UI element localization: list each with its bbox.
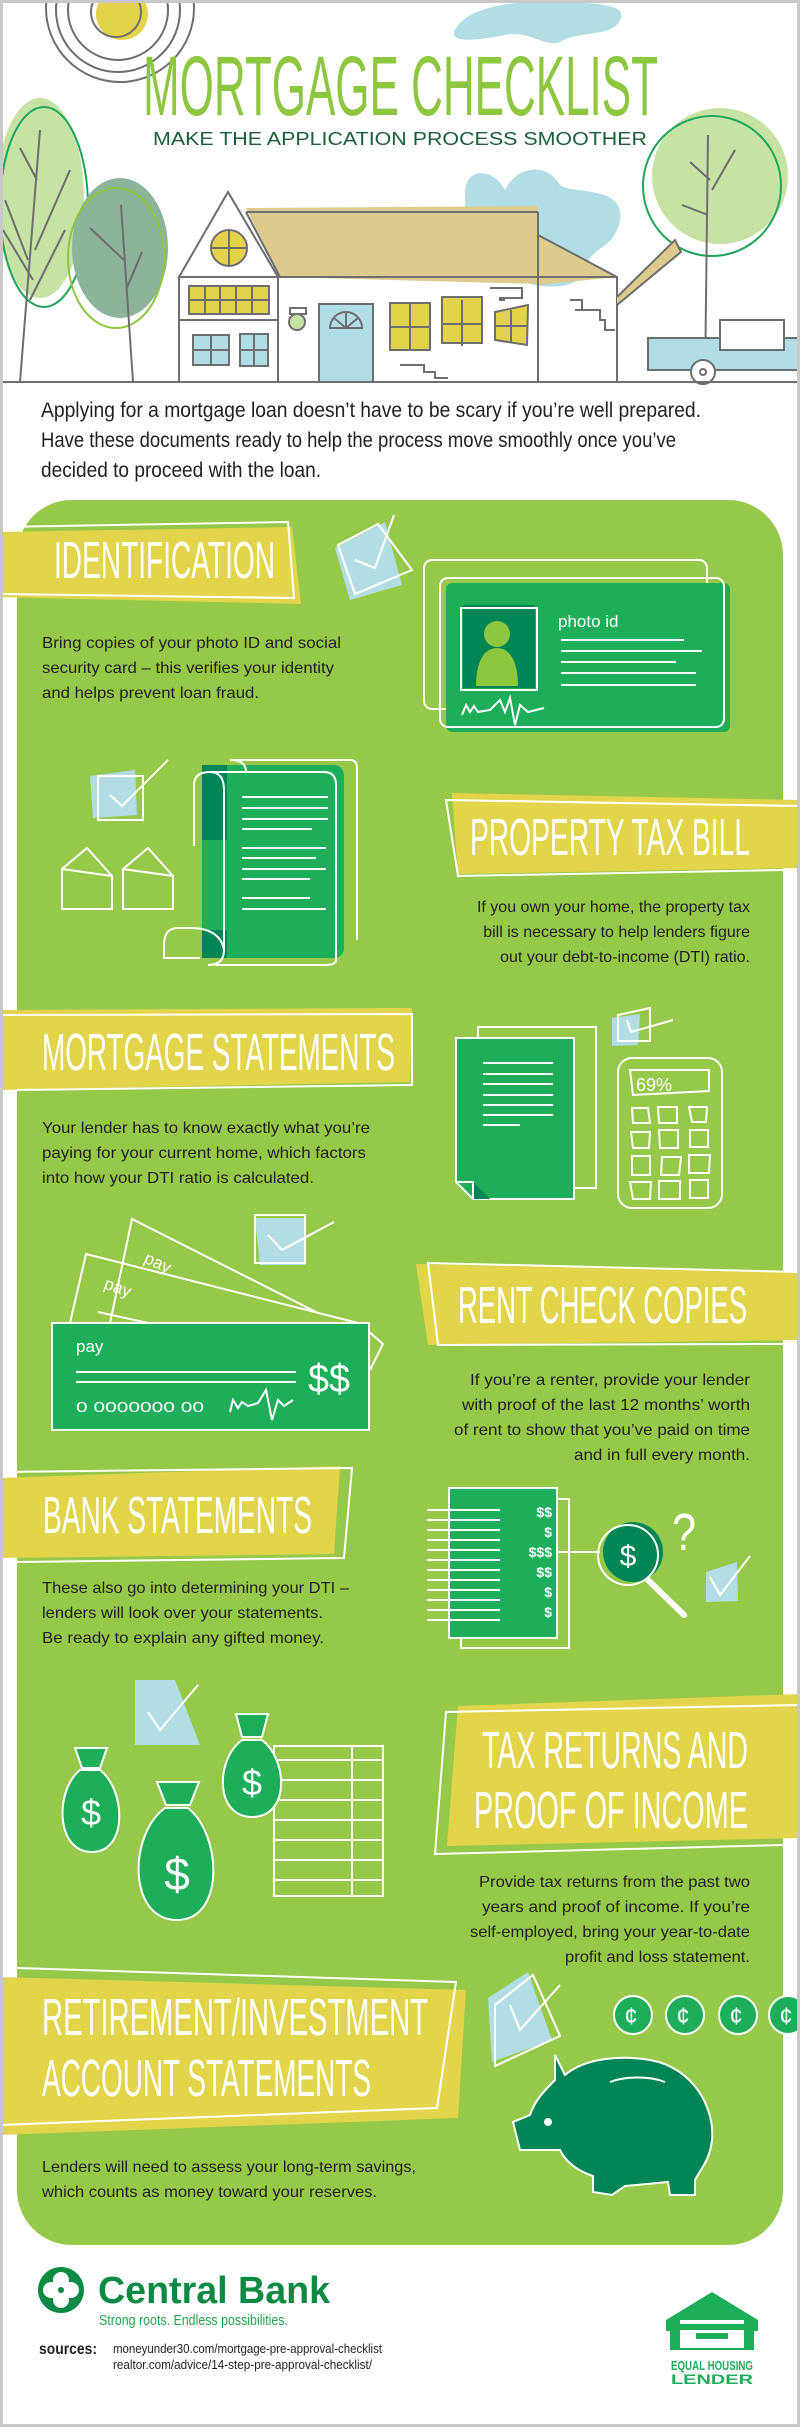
footer: sources: moneyunder30.com/mortgage-pre-approval-checklist xyxy=(113,2341,382,2356)
text: mortgage statements: Your lender has to know exactly what you’re xyxy=(42,1120,370,1137)
intro text: decided to proceed with the loan. xyxy=(41,459,321,482)
text: mortgage statements xyxy=(42,1120,370,1187)
icon: checkbox and houses xyxy=(62,760,173,909)
text: tax returns: profit and loss statement. xyxy=(565,1949,750,1966)
header illustration: sun xyxy=(46,0,194,82)
text: mortgage statements: paying for your current home, which factors xyxy=(42,1145,366,1162)
icon: piggy bank with coins: ¢ xyxy=(729,2003,743,2030)
icon: money bags and ledger xyxy=(63,1680,383,1920)
text: retirement: which counts as money toward your reserves. xyxy=(41,2184,377,2201)
text: rent check copies: and in full every month. xyxy=(574,1447,750,1464)
banner: bank statements xyxy=(0,1466,352,1562)
intro text: Have these documents ready to help the process move smoothly once you’ve xyxy=(41,429,676,452)
text: tax returns: Provide tax returns from the past two xyxy=(479,1874,750,1891)
header illustration: trees xyxy=(0,98,788,382)
text: rent check copies xyxy=(454,1372,751,1464)
icon: piggy bank with coins: ¢ xyxy=(676,2003,690,2030)
footer: equal housing lender logo: EQUAL HOUSING xyxy=(671,2358,753,2373)
icon: checks: 0 0000000 00 xyxy=(76,1399,204,1416)
header illustration: clouds xyxy=(454,2,621,287)
icon: money bags and ledger: $ xyxy=(81,1792,101,1833)
icon: documents xyxy=(456,1027,596,1199)
banner: identification xyxy=(0,522,301,604)
icon: scroll document xyxy=(164,760,357,965)
text: identification: security card – this verifies your identity xyxy=(42,660,334,677)
footer: central bank logo: Strong roots. Endless possibilities. xyxy=(99,2312,288,2329)
icon: bank statement with magnifier: $$$ xyxy=(529,1544,552,1560)
text: property tax: out your debt-to-income (DTI) ratio. xyxy=(500,949,750,966)
text: identification: and helps prevent loan fraud. xyxy=(42,685,259,702)
banner: tax returns and proof of income xyxy=(435,1694,800,1854)
icon: checks xyxy=(52,1215,383,1430)
banner: identification: IDENTIFICATION xyxy=(54,532,275,590)
icon: bank statement with magnifier: $ xyxy=(620,1540,637,1573)
text: tax returns xyxy=(470,1874,750,1966)
icon: checks: pay xyxy=(102,1274,134,1301)
footer: sources xyxy=(39,2341,382,2372)
text: bank statements: Be ready to explain any gifted money. xyxy=(42,1630,324,1647)
icon: bank statement with magnifier: $ xyxy=(544,1604,552,1620)
text: bank statements: lenders will look over your statements. xyxy=(42,1605,323,1622)
text: mortgage statements: into how your DTI ratio is calculated. xyxy=(42,1170,314,1187)
banner: mortgage statements xyxy=(0,1008,412,1090)
icon: piggy bank with coins: ¢ xyxy=(779,2003,793,2030)
text: retirement: Lenders will need to assess your long-term savings, xyxy=(42,2159,416,2176)
text: property tax: If you own your home, the property tax xyxy=(477,899,750,916)
footer: equal housing lender logo xyxy=(666,2292,758,2387)
icon: money bags and ledger: $ xyxy=(242,1762,262,1803)
footer: sources: sources: xyxy=(39,2341,97,2358)
text: rent check copies: with proof of the last 12 months’ worth xyxy=(461,1397,750,1414)
icon: bank statement with magnifier: $$ xyxy=(536,1504,552,1520)
footer: central bank logo xyxy=(38,2267,331,2329)
intro text: Applying for a mortgage loan doesn’t have to be scary if you’re well prepared. xyxy=(41,399,701,422)
text: tax returns: years and proof of income. If you’re xyxy=(482,1899,750,1916)
banner: property tax bill xyxy=(446,793,800,876)
header illustration: house xyxy=(179,192,800,384)
banner: retirement/investment account statements: RETIREMENT/INVESTMENT xyxy=(42,1989,428,2047)
ground line xyxy=(3,381,797,383)
icon: photo id card xyxy=(424,560,730,732)
text: identification: Bring copies of your photo ID and social xyxy=(42,635,341,652)
banner: rent check copies xyxy=(416,1263,800,1345)
icon: bank statement with magnifier: $ xyxy=(544,1524,552,1540)
icon: bank statement with magnifier: $$ xyxy=(536,1564,552,1580)
text: retirement xyxy=(41,2159,416,2201)
subtitle: MAKE THE APPLICATION PROCESS SMOOTHER xyxy=(153,129,647,149)
icon: bank statement with magnifier xyxy=(427,1488,750,1648)
icon: money bags and ledger: $ xyxy=(164,1848,190,1900)
icon: photo id card: photo id xyxy=(558,612,618,631)
icon: bank statement with magnifier: $ xyxy=(544,1584,552,1600)
text: bank statements: These also go into determining your DTI – xyxy=(42,1580,349,1597)
icon: piggy bank with coins: ¢ xyxy=(624,2003,638,2030)
icon: bank statement with magnifier: ? xyxy=(672,1504,696,1562)
text: property tax: bill is necessary to help lenders figure xyxy=(483,924,750,941)
text: property tax xyxy=(477,899,750,966)
banner: bank statements: BANK STATEMENTS xyxy=(43,1487,312,1545)
icon: checks: pay xyxy=(76,1337,104,1356)
icon: calculator: 69% xyxy=(636,1075,672,1095)
footer: central bank logo: Central Bank xyxy=(98,2270,331,2312)
icon: calculator xyxy=(612,1008,722,1208)
banner: retirement/investment account statements: ACCOUNT STATEMENTS xyxy=(42,2050,371,2108)
text: rent check copies: of rent to show that you’ve paid on time xyxy=(454,1422,750,1439)
icon: checks: pay xyxy=(141,1248,175,1277)
footer: sources: realtor.com/advice/14-step-pre-approval-checklist/ xyxy=(113,2357,372,2372)
footer: equal housing lender logo: LENDER xyxy=(671,2371,753,2387)
icon: piggy bank with coins xyxy=(488,1972,800,2195)
green panel xyxy=(17,500,783,2245)
text: identification xyxy=(42,635,341,702)
icon: checkbox near id xyxy=(335,515,412,600)
intro text xyxy=(41,399,701,482)
icon: checks: $$ xyxy=(308,1357,350,1401)
text: bank statements xyxy=(42,1580,349,1647)
banner: mortgage statements: MORTGAGE STATEMENTS xyxy=(42,1024,395,1082)
banner: retirement/investment account statements xyxy=(0,1968,466,2135)
text: tax returns: self-employed, bring your year-to-date xyxy=(470,1924,750,1941)
text: rent check copies: If you’re a renter, provide your lender xyxy=(470,1372,751,1389)
